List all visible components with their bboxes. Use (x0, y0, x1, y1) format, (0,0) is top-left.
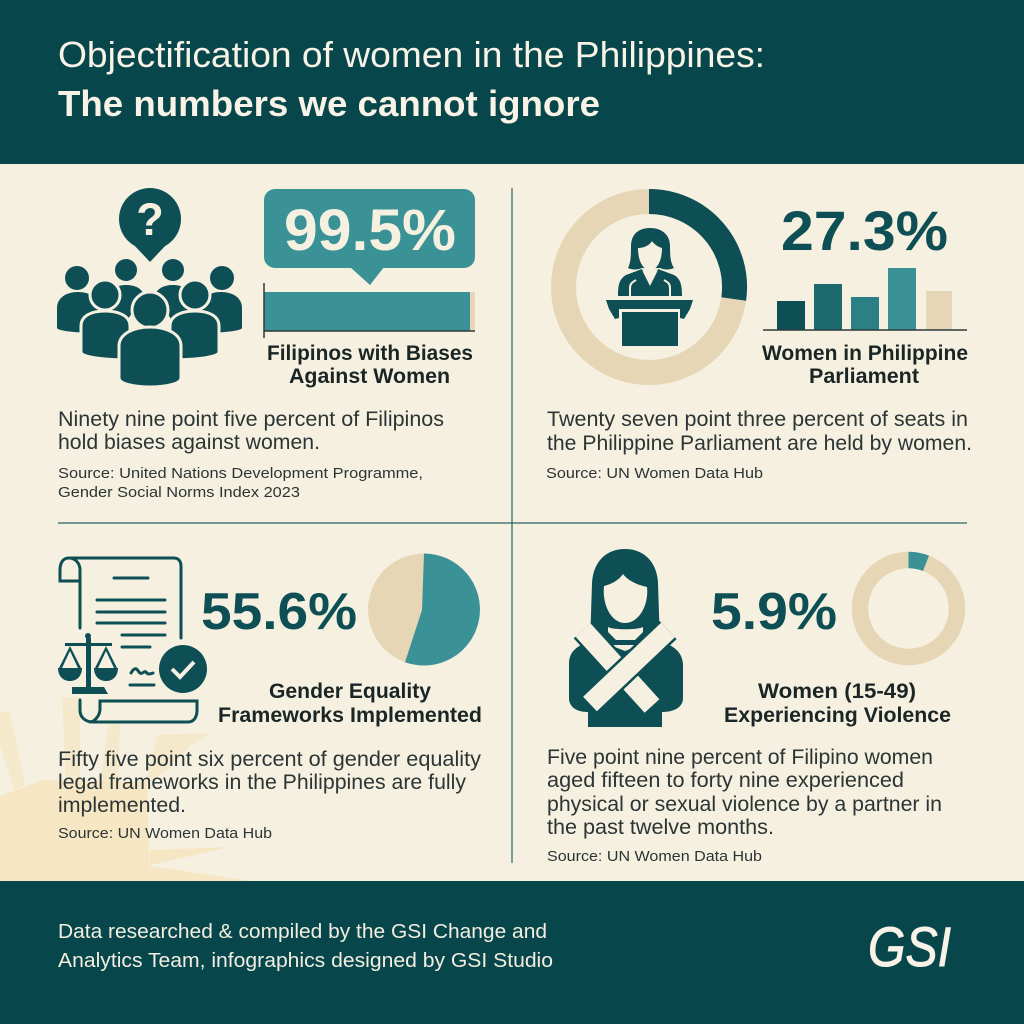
footer credits: Analytics Team, infographics designed by GSI Studio (58, 949, 553, 972)
icon: crowd with question bubble: ? (136, 194, 164, 245)
footer credits (58, 920, 553, 972)
icon: woman with crossed arms (569, 549, 683, 727)
heading: Against Women (289, 365, 450, 388)
source: Source: UN Women Data Hub (58, 825, 272, 842)
heading (267, 342, 473, 388)
text block (58, 747, 481, 817)
stat: 55.6%: 55.6% (201, 583, 357, 641)
panel: biases (57, 188, 475, 501)
title: The numbers we cannot ignore (58, 83, 600, 124)
icon: legal document with scales (58, 558, 207, 722)
icon: woman at podium (606, 228, 693, 346)
text block: implemented. (58, 793, 186, 817)
stat: 27.3%: 27.3% (781, 199, 948, 262)
header (0, 0, 1024, 164)
text block: Fifty five point six percent of gender equality (58, 747, 481, 771)
callout: 99.5% (264, 189, 475, 285)
panel: violence (547, 549, 957, 865)
source: Gender Social Norms Index 2023 (58, 484, 300, 501)
bar chart: 99.5 (264, 283, 475, 338)
pie chart: 55.6 (368, 554, 480, 666)
logo: GSI: GSI (868, 915, 951, 978)
heading: Frameworks Implemented (218, 704, 482, 727)
bar chart (763, 268, 967, 330)
source: Source: United Nations Development Programme, (58, 465, 423, 482)
text block: physical or sexual violence by a partner in (547, 792, 942, 816)
source (58, 465, 423, 501)
heading (724, 680, 951, 727)
dividers (58, 188, 967, 863)
heading: Women in Philippine (762, 342, 968, 365)
heading (762, 342, 968, 388)
text block: aged fifteen to forty nine experienced (547, 768, 904, 792)
stat: 5.9%: 5.9% (711, 583, 837, 641)
heading (218, 680, 482, 727)
panel: parliament (546, 199, 972, 482)
text block: Ninety nine point five percent of Filipinos (58, 407, 444, 431)
donut chart: 5.9 (860, 560, 957, 657)
heading: Women (15-49) (758, 680, 916, 703)
text block (547, 745, 942, 839)
source: Source: UN Women Data Hub (546, 465, 763, 482)
text block (58, 407, 444, 454)
text block: Five point nine percent of Filipino women (547, 745, 933, 769)
text block: legal frameworks in the Philippines are fully (58, 770, 466, 794)
footer (0, 881, 1024, 1024)
text block: the past twelve months. (547, 815, 774, 839)
text block: the Philippine Parliament are held by women. (547, 431, 972, 455)
source: Source: UN Women Data Hub (547, 848, 762, 865)
footer credits: Data researched & compiled by the GSI Change and (58, 920, 547, 943)
heading: Experiencing Violence (724, 704, 951, 727)
text block (547, 407, 972, 455)
text block: Twenty seven point three percent of seats in (547, 407, 968, 431)
heading: Gender Equality (269, 680, 431, 703)
icon: crowd with question bubble (57, 188, 242, 387)
heading: Parliament (809, 365, 919, 388)
donut chart: 27.3 (564, 202, 735, 372)
title: Objectification of women in the Philippines: (58, 34, 765, 75)
text block: hold biases against women. (58, 430, 320, 454)
panel: frameworks (58, 554, 482, 842)
decorative sun (0, 697, 250, 881)
callout: 99.5%: 99.5% (284, 198, 456, 263)
title (58, 34, 765, 124)
heading: Filipinos with Biases (267, 342, 473, 365)
